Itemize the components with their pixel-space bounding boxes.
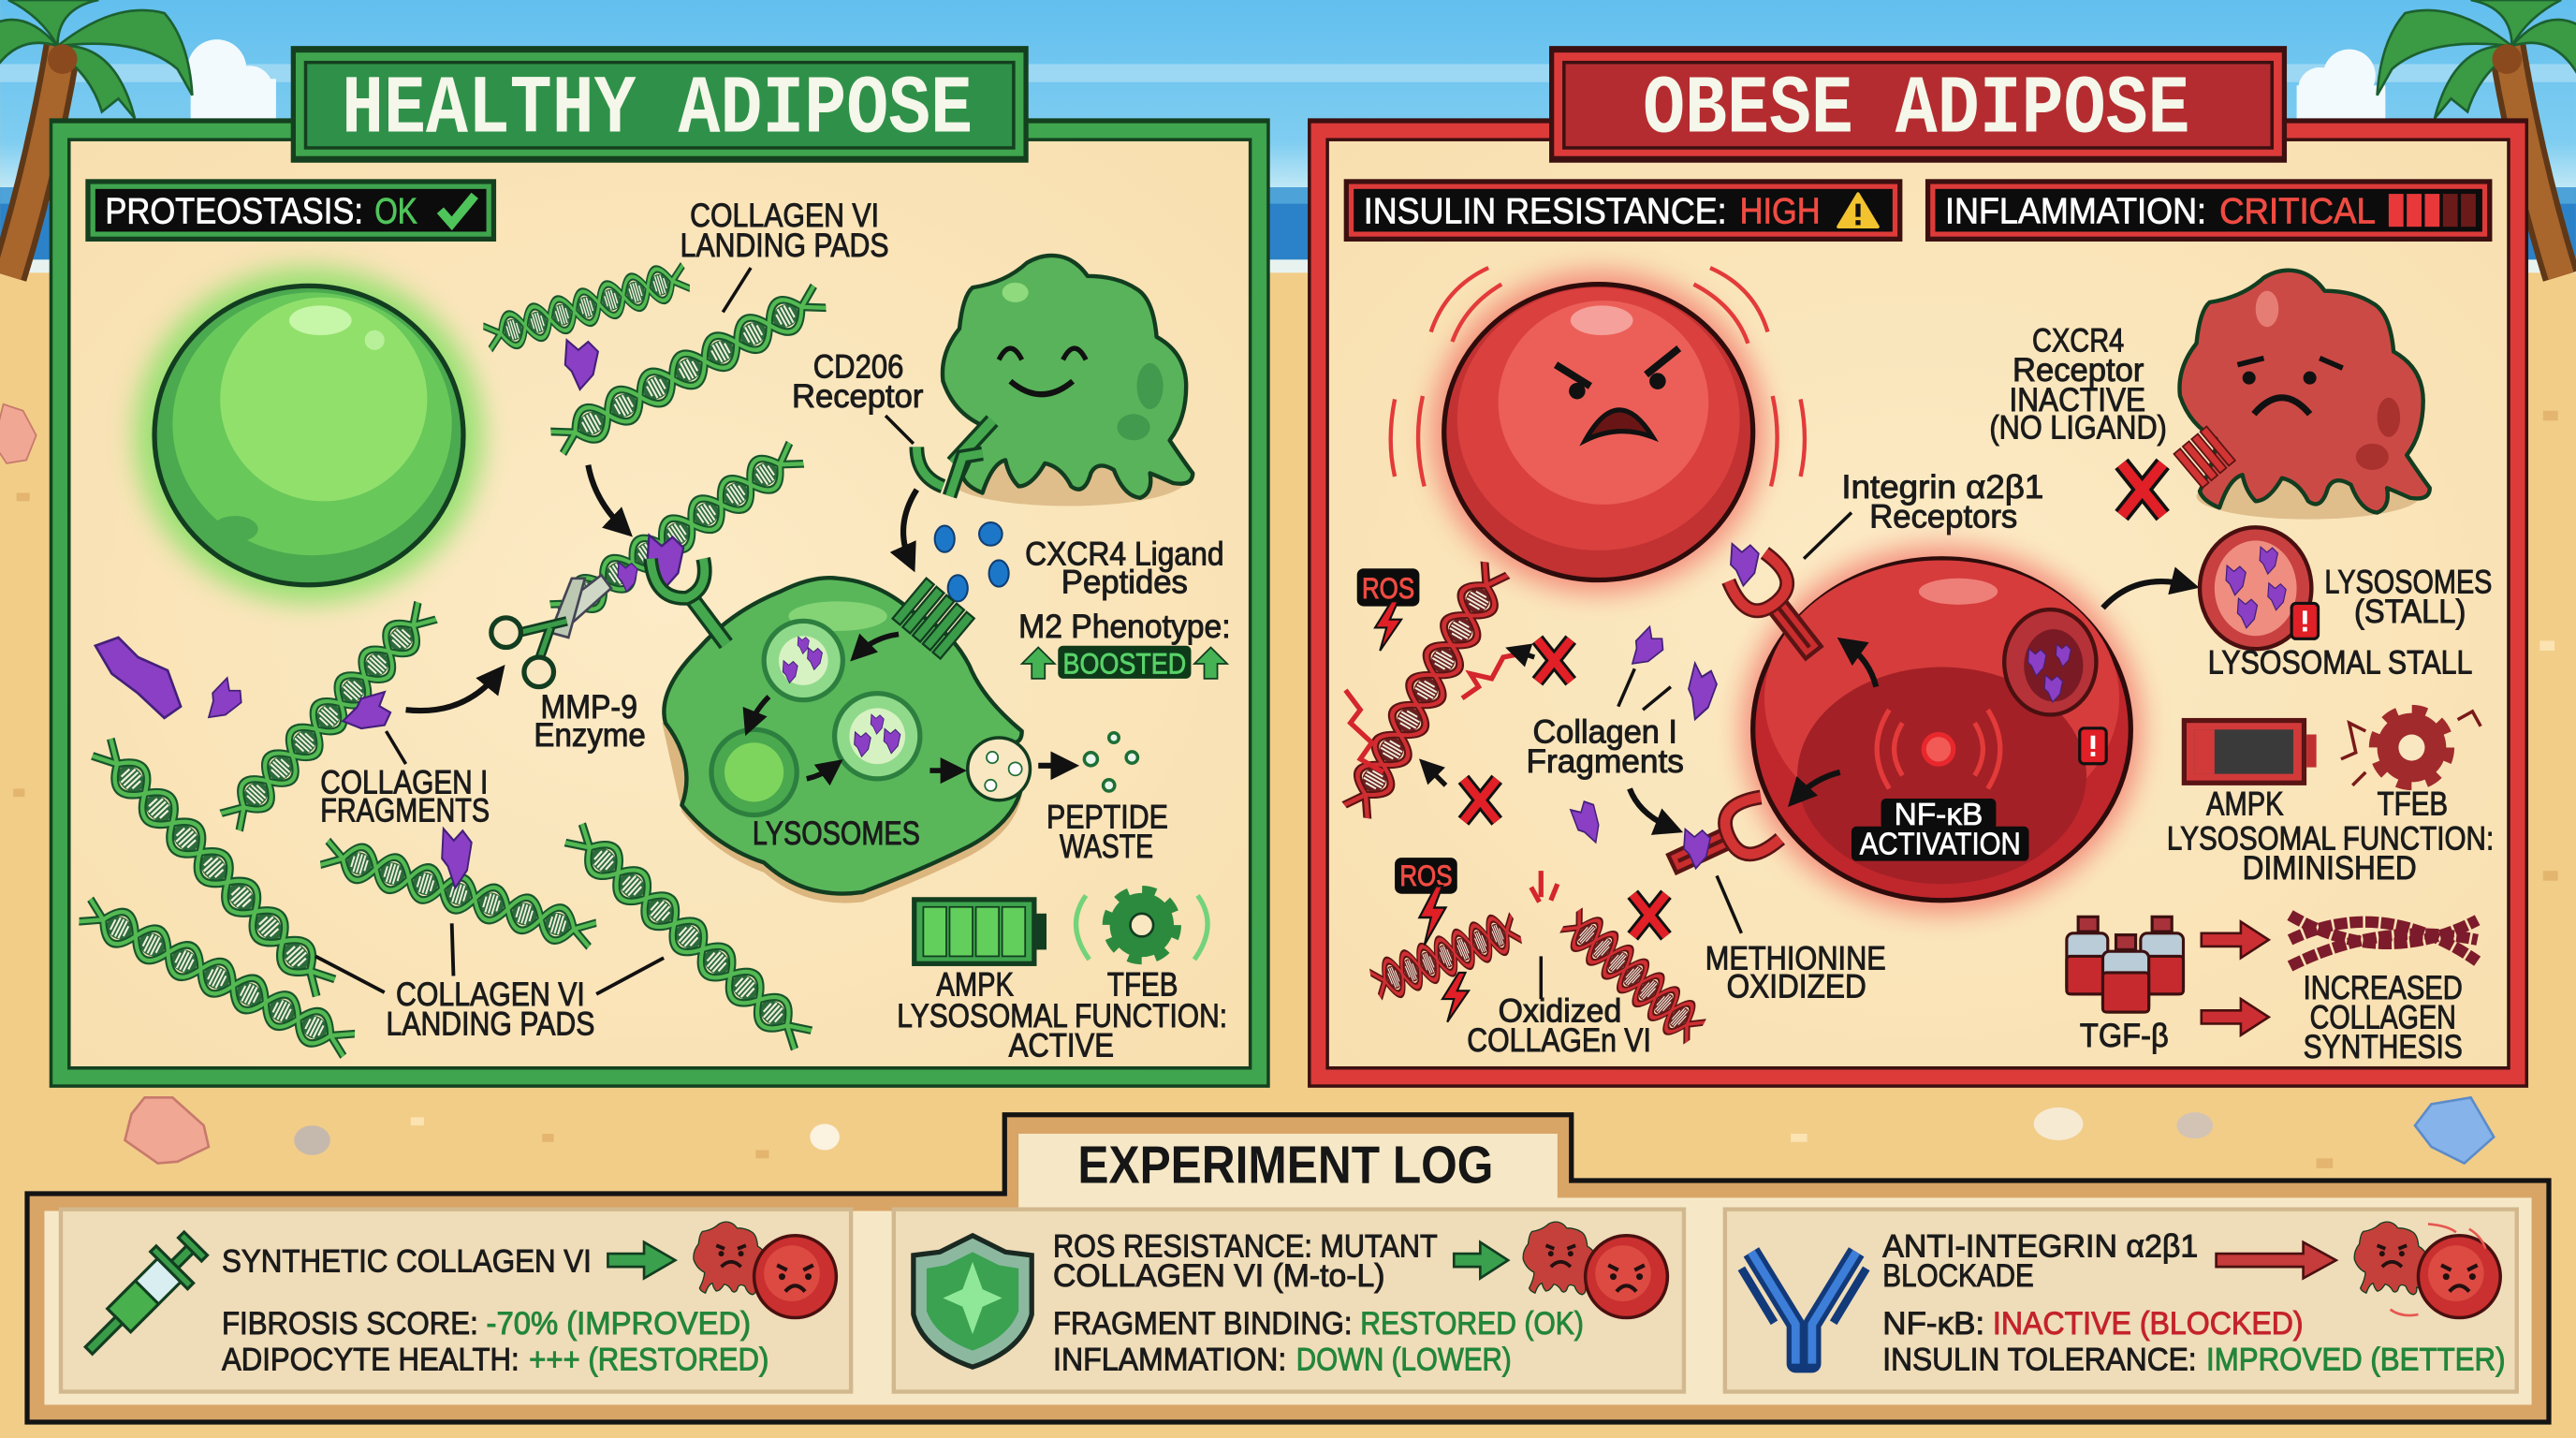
MMP-9 scissors	[491, 575, 611, 687]
label: MMP-9 enzyme: MMP-9	[540, 689, 637, 726]
label: collagen I fragments: FRAGMENTS	[320, 793, 490, 829]
alert badge	[2080, 728, 2106, 764]
label: collagen VI landing pads top	[681, 198, 889, 312]
results: RESTORED (OK)	[1360, 1306, 1584, 1342]
CXCR4 receptor green	[893, 579, 974, 659]
X: receptor inactive	[2122, 463, 2163, 516]
label: CXCR4 receptor inactive: CXCR4	[2032, 323, 2124, 360]
panel: experiment log	[24, 1112, 2552, 1425]
collagen bundle	[2291, 916, 2478, 966]
label: oxidized collagen VI: COLLAGEn VI	[1467, 1022, 1651, 1059]
obese adipocyte angry	[1391, 268, 1805, 594]
label: NF-kB activation: NF-κB	[1895, 798, 1983, 832]
label: lysosomal function active: ACTIVE	[1009, 1027, 1114, 1064]
label: oxidized collagen VI: Oxidized	[1499, 993, 1621, 1030]
title: healthy adipose	[291, 46, 1029, 163]
label: MMP-9 enzyme: Enzyme	[534, 717, 646, 754]
M2 phenotype boosted	[1018, 609, 1231, 681]
results: IMPROVED (BETTER)	[2206, 1343, 2505, 1378]
arrows inside cell	[749, 634, 956, 779]
gear TFEB active	[1076, 890, 1208, 960]
gear TFEB broken	[2341, 710, 2481, 785]
lysosome 1	[764, 621, 842, 700]
panel: obese adipose	[1308, 46, 2528, 1088]
text: anti-integrin	[1882, 1229, 2198, 1294]
card: anti-integrin blockade	[1725, 1210, 2517, 1392]
label: CXCR4 receptor inactive: (NO LIGAND)	[1989, 410, 2167, 447]
text: ROS resistance: ROS RESISTANCE: MUTANT	[1053, 1229, 1438, 1265]
status: proteostasis: OK	[374, 192, 417, 232]
label: collagen VI landing pads top: LANDING PADS	[681, 227, 889, 264]
arrow: receptor to peptides	[903, 490, 916, 562]
healthy adipocyte	[135, 268, 483, 603]
results: INACTIVE (BLOCKED)	[1993, 1306, 2304, 1342]
label: integrin receptors: Integrin α2β1	[1841, 469, 2043, 506]
cloud right	[2297, 50, 2385, 122]
text: ROS resistance	[1053, 1229, 1438, 1294]
label: oxidized collagen VI	[1467, 956, 1651, 1059]
label: integrin receptors	[1804, 469, 2043, 559]
collagen I fragments loose	[95, 638, 247, 727]
status: inflammation: INFLAMMATION:	[1945, 192, 2206, 232]
status: insulin resistance: HIGH	[1740, 192, 1821, 232]
shell left edge	[0, 404, 37, 463]
inflamed cell NF-kB	[1741, 546, 2143, 914]
CXCR4 ligand peptides	[935, 522, 1009, 601]
broken oxidized collagen VI	[1368, 858, 1707, 1046]
label: CD206 receptor: Receptor	[792, 378, 924, 415]
results: ADIPOCYTE HEALTH:	[222, 1343, 520, 1378]
arrow and peptide waste: PEPTIDE	[1046, 800, 1168, 836]
label: lysosomes: LYSOSOMES	[753, 815, 920, 852]
title: obese adipose	[1549, 46, 2287, 163]
icon: shield	[914, 1236, 1032, 1367]
label: NF-kB activation	[1852, 798, 2029, 862]
broken oxidized collagen VI: ROS	[1399, 858, 1453, 892]
label: lysosomal function diminished: DIMINISHED	[2243, 850, 2417, 887]
palm tree right	[2378, 0, 2576, 276]
results: NF-κB:	[1882, 1306, 1984, 1342]
results	[222, 1306, 768, 1378]
label: lysosomal function diminished	[2167, 785, 2494, 887]
results: FRAGMENT BINDING:	[1053, 1306, 1352, 1342]
card: synthetic collagen VI	[61, 1210, 851, 1392]
arrows in cell	[1795, 644, 1876, 799]
label: lysosomal function active	[897, 967, 1227, 1064]
integrin receptor top	[1726, 544, 1835, 668]
label: collagen VI landing pads lower: LANDING PADS	[386, 1006, 594, 1043]
label: lysosomal function active: LYSOSOMAL FUNCTION:	[897, 998, 1227, 1034]
palm tree left	[0, 0, 192, 276]
arrow to scissors	[406, 674, 498, 711]
integrin receptor bottom	[1661, 794, 1782, 888]
label: lysosomal function active: TFEB	[1107, 967, 1178, 1004]
X marks upper	[1463, 639, 1571, 821]
icon: syringe	[70, 1225, 214, 1369]
status: inflammation: CRITICAL	[2219, 192, 2376, 232]
label: methionine oxidized	[1705, 875, 1886, 1005]
arrow and peptide waste	[1038, 733, 1168, 865]
collagen strand with fragment	[218, 599, 439, 833]
collagen I fragments: Collagen I	[1532, 713, 1677, 750]
results: FIBROSIS SCORE:	[222, 1306, 478, 1342]
mini cells	[694, 1222, 836, 1318]
text: anti-integrin: BLOCKADE	[1882, 1258, 2034, 1294]
collagen I fragments: Fragments	[1526, 743, 1684, 780]
red arrows	[2202, 922, 2269, 1035]
results: DOWN (LOWER)	[1296, 1343, 1512, 1378]
stalled lysosome	[2200, 527, 2319, 649]
M2 phenotype boosted: M2 Phenotype:	[1018, 609, 1231, 645]
results	[1882, 1306, 2505, 1378]
results: INFLAMMATION:	[1053, 1343, 1286, 1378]
arrow to lysosome	[2102, 581, 2188, 608]
green receptor on cell	[651, 559, 726, 644]
label: CD206 receptor	[792, 349, 924, 444]
label: collagen I fragments	[320, 731, 490, 829]
label: CXCR4 receptor inactive	[1989, 323, 2167, 447]
label: methionine oxidized: METHIONINE	[1705, 940, 1886, 976]
vibration lines	[1391, 268, 1805, 486]
label: lysosomal function diminished: AMPK	[2206, 785, 2284, 822]
label: lysosomes stall: LYSOSOMES	[2324, 565, 2492, 601]
collagen fragment	[565, 340, 598, 389]
collagen I fragments	[1526, 625, 1720, 849]
collagen strand B	[549, 282, 828, 457]
card: ROS resistance	[894, 1210, 1684, 1392]
lysosome 3	[711, 729, 797, 814]
status: proteostasis	[85, 179, 496, 242]
label: CXCR4 ligand peptides	[1025, 536, 1224, 601]
battery AMPK low	[2182, 718, 2317, 785]
arrow: strand to receptor	[588, 465, 624, 529]
oxidized collagen strand with ROS	[1340, 560, 1534, 820]
label: collagen I fragments: COLLAGEN I	[320, 765, 488, 801]
label: CXCR4 receptor inactive: INACTIVE	[2009, 382, 2145, 418]
arrow and peptide waste: WASTE	[1060, 829, 1153, 865]
label: CXCR4 ligand peptides: CXCR4 Ligand	[1025, 536, 1224, 573]
label: increased collagen synthesis: SYNTHESIS	[2304, 1029, 2463, 1065]
lysosome 2	[835, 694, 920, 779]
label: increased collagen synthesis: COLLAGEN	[2310, 1000, 2456, 1036]
collagen VI strands lower	[77, 736, 814, 1060]
label: CD206 receptor: CD206	[813, 349, 903, 386]
mini cells	[1523, 1222, 1667, 1318]
lysosome in cell	[2004, 609, 2096, 714]
bite: exocytosis	[968, 738, 1030, 800]
M2 phenotype boosted: BOOSTED	[1063, 647, 1186, 681]
text: ROS resistance: COLLAGEN VI (M-to-L)	[1053, 1258, 1385, 1294]
status: insulin resistance: INSULIN RESISTANCE:	[1364, 192, 1727, 232]
text: synthetic collagen: SYNTHETIC COLLAGEN VI	[222, 1243, 592, 1279]
label: increased collagen synthesis	[2304, 970, 2463, 1065]
arrow red	[2217, 1242, 2336, 1278]
healthy macrophage cell with lysosomes	[662, 578, 1030, 903]
collagen strand A	[482, 261, 691, 353]
mini cells	[2354, 1222, 2500, 1318]
title: healthy adipose: HEALTHY ADIPOSE	[342, 64, 973, 156]
label: MMP-9 enzyme	[534, 689, 646, 754]
label: methionine oxidized: OXIDIZED	[1727, 968, 1866, 1005]
battery AMPK full	[912, 897, 1046, 966]
shells and pebbles	[124, 1097, 2494, 1164]
status: insulin resistance	[1344, 179, 1902, 242]
oxidized collagen strand with ROS: ROS	[1362, 571, 1414, 605]
icon: antibody	[1741, 1252, 1866, 1364]
label: lysosomes stall: LYSOSOMAL STALL	[2208, 645, 2472, 682]
panel: healthy adipose	[50, 46, 1270, 1088]
status: inflammation	[1925, 179, 2492, 242]
label: lysosomal function diminished: TFEB	[2378, 785, 2448, 822]
arrow green	[1454, 1242, 1508, 1278]
results: -70% (IMPROVED)	[487, 1306, 751, 1342]
label: collagen VI landing pads lower	[315, 923, 664, 1043]
label: lysosomal function active: AMPK	[936, 967, 1014, 1004]
results: +++ (RESTORED)	[529, 1343, 768, 1378]
heading: experiment log: EXPERIMENT LOG	[1077, 1136, 1493, 1195]
label: lysosomal function diminished: LYSOSOMAL FUNCTION:	[2167, 820, 2494, 857]
label: CXCR4 receptor inactive: Receptor	[2012, 352, 2144, 389]
label: CXCR4 ligand peptides: Peptides	[1061, 565, 1188, 601]
results	[1053, 1306, 1584, 1378]
TGF-beta vials	[2067, 917, 2183, 1012]
results: INSULIN TOLERANCE:	[1882, 1343, 2197, 1378]
label: increased collagen synthesis: INCREASED	[2304, 970, 2463, 1006]
CD206 receptor	[916, 420, 992, 496]
label: TGF-beta: TGF-β	[2080, 1018, 2169, 1054]
collagen strand with fragment bound	[548, 439, 806, 628]
label: lysosomes stall: (STALL)	[2354, 594, 2466, 630]
label: NF-kB activation: ACTIVATION	[1860, 828, 2021, 862]
obese macrophage sad	[2174, 271, 2430, 520]
label: collagen VI landing pads top: COLLAGEN VI	[690, 198, 879, 234]
cloud left	[187, 39, 276, 122]
label: collagen VI landing pads lower: COLLAGEN VI	[396, 976, 585, 1013]
large healthy macrophage	[943, 256, 1193, 506]
text: anti-integrin: ANTI-INTEGRIN α2β1	[1882, 1229, 2198, 1265]
arrow green	[607, 1242, 675, 1278]
label: lysosomes stall	[2208, 565, 2492, 682]
title: obese adipose: OBESE ADIPOSE	[1643, 64, 2190, 156]
status: proteostasis: PROTEOSTASIS:	[105, 192, 363, 232]
label: integrin receptors: Receptors	[1869, 498, 2017, 535]
